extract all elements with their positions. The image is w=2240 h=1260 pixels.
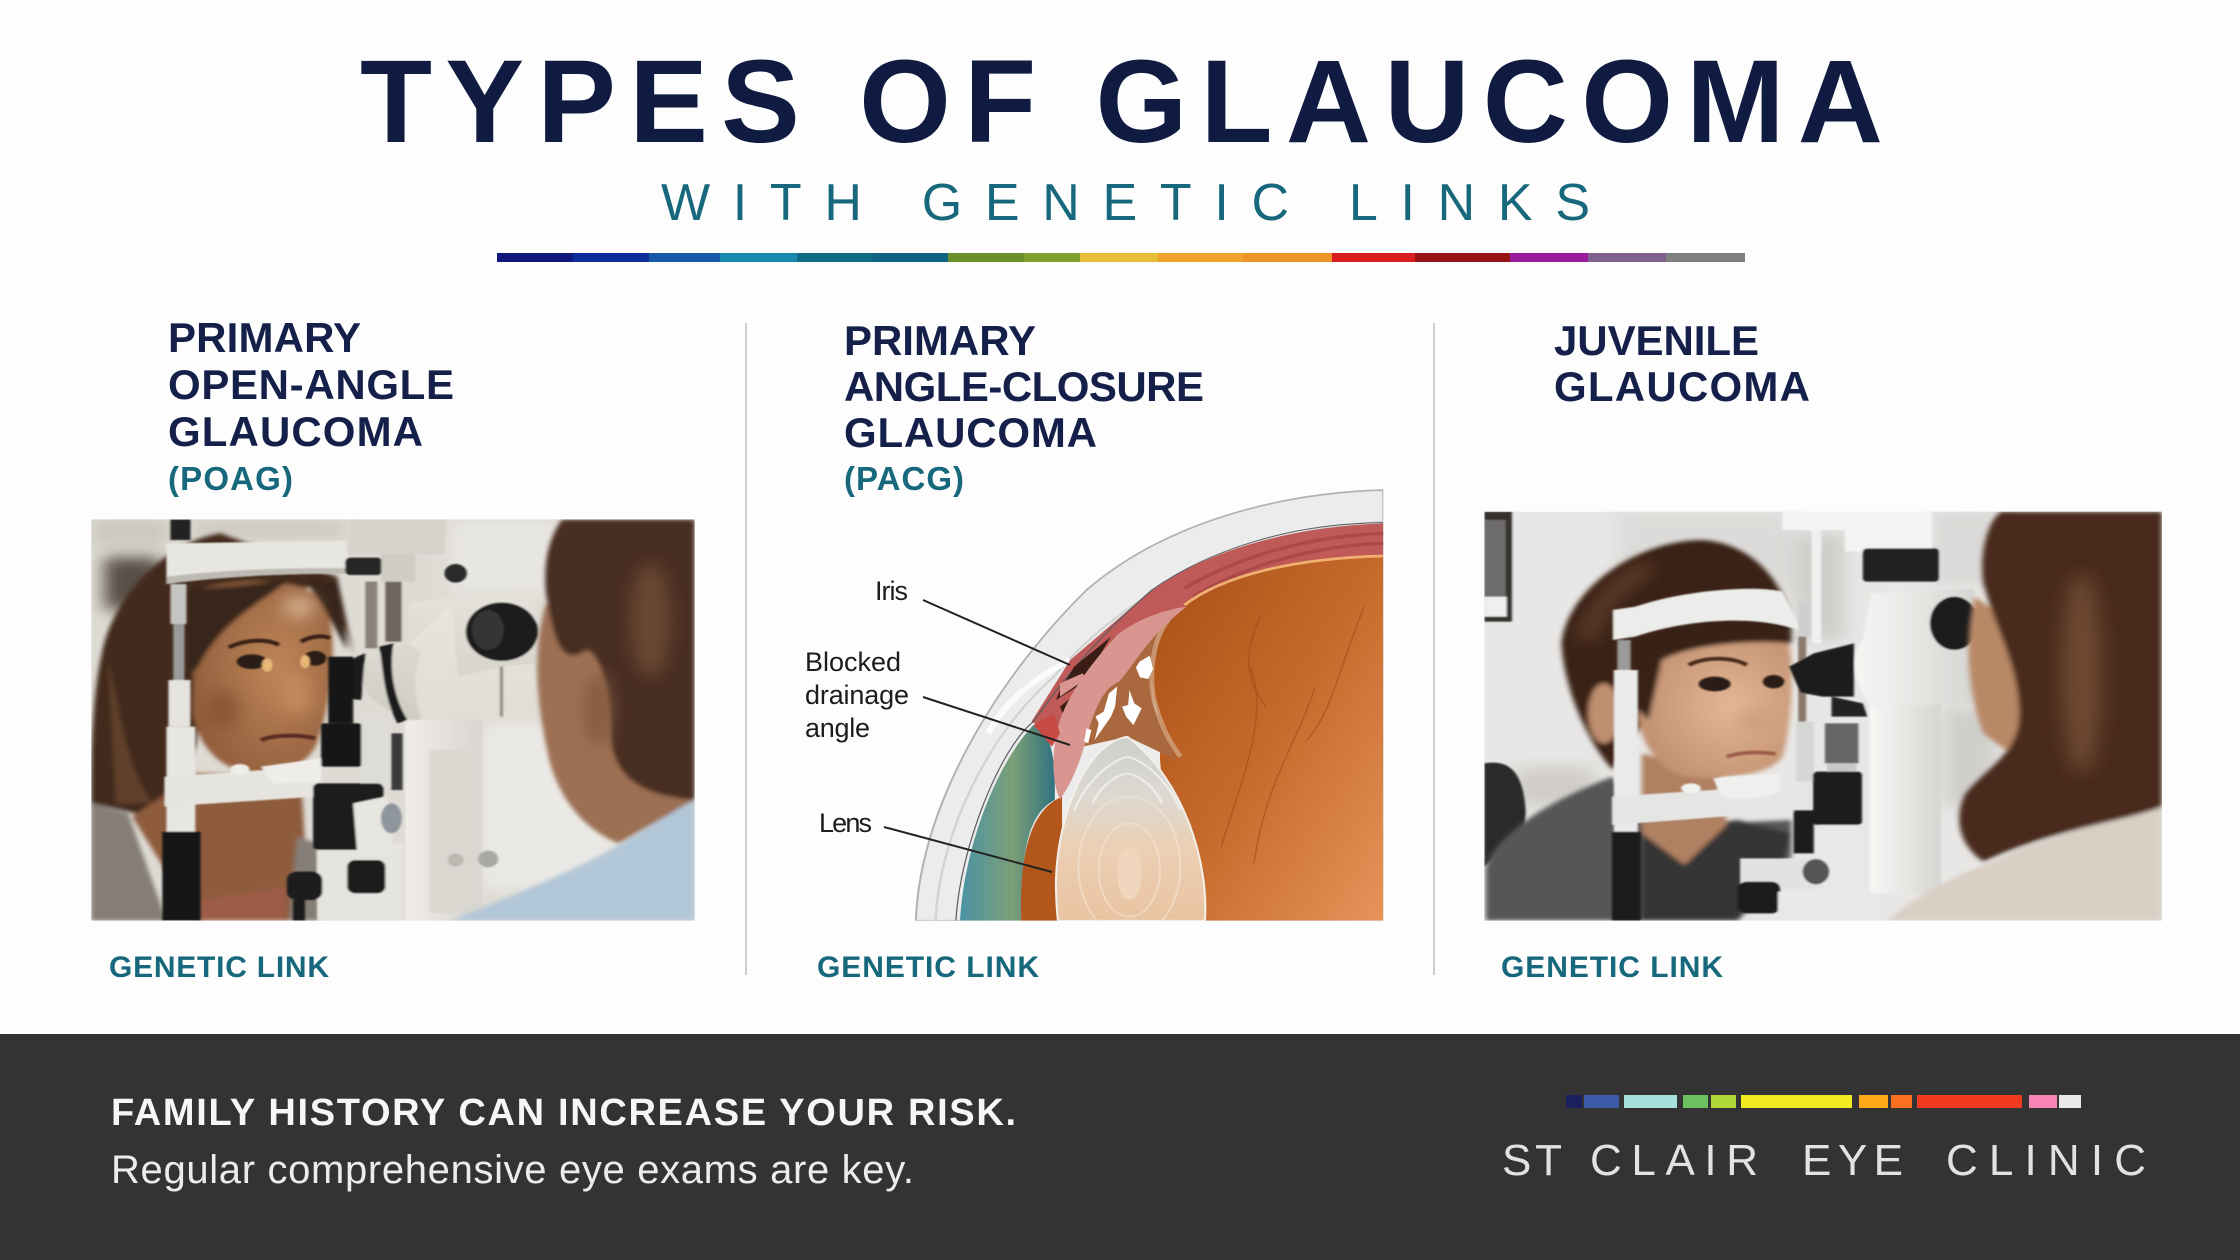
label: blocked drainage angle: angle: [805, 713, 870, 743]
logo wordmark: [1502, 1136, 2146, 1185]
label: genetic link: GENETIC LINK: [1501, 951, 1723, 984]
heading: POAG: GLAUCOMA: [168, 408, 423, 455]
panel: POAG: [91, 314, 695, 984]
heading: juvenile glaucoma: JUVENILE: [1554, 317, 1759, 364]
clinic logo: [1502, 1095, 2146, 1185]
heading: PACG: [844, 317, 1204, 497]
label: lens: [819, 808, 1052, 872]
heading: PACG: ANGLE-CLOSURE: [844, 363, 1204, 410]
heading: PACG: (PACG): [844, 460, 964, 497]
label: iris: Iris: [875, 576, 908, 606]
logo wordmark: CLINIC: [1946, 1136, 2146, 1185]
footer headline: FAMILY HISTORY CAN INCREASE YOUR RISK.: [111, 1092, 1016, 1134]
footer band: [0, 1034, 2240, 1260]
column dividers: [745, 323, 1435, 975]
logo wordmark: EYE: [1802, 1136, 1903, 1185]
label: genetic link: GENETIC LINK: [817, 951, 1039, 984]
label: blocked drainage angle: [805, 647, 1070, 745]
heading: POAG: [168, 314, 454, 497]
logo wordmark: CLAIR: [1590, 1136, 1758, 1185]
rainbow divider bar: [497, 253, 1745, 262]
panel: PACG: [805, 317, 1383, 984]
label: blocked drainage angle: drainage: [805, 680, 909, 710]
heading: POAG: OPEN-ANGLE: [168, 361, 454, 408]
heading: POAG: (POAG): [168, 460, 293, 497]
heading: PACG: PRIMARY: [844, 317, 1036, 364]
label: lens: Lens: [819, 808, 872, 838]
title: TYPES OF GLAUCOMA: [360, 36, 1883, 168]
photo: woman having slit-lamp eye exam: [91, 519, 695, 921]
logo wordmark: ST: [1502, 1136, 1562, 1185]
label: iris: [875, 576, 1070, 665]
logo colour bar: [1566, 1095, 2081, 1108]
label: blocked drainage angle: Blocked: [805, 647, 901, 677]
eye anatomy diagram: [914, 489, 1384, 921]
heading: juvenile glaucoma: GLAUCOMA: [1554, 363, 1810, 410]
heading: POAG: PRIMARY: [168, 314, 361, 361]
photo: boy having slit-lamp eye exam: [1484, 512, 2162, 921]
heading: juvenile glaucoma: [1554, 317, 1810, 410]
heading: PACG: GLAUCOMA: [844, 409, 1097, 456]
subtitle: WITH GENETIC LINKS: [661, 174, 1590, 232]
footer subtext: Regular comprehensive eye exams are key.: [111, 1148, 914, 1192]
label: genetic link: GENETIC LINK: [109, 951, 329, 984]
panel: juvenile glaucoma: [1484, 317, 2162, 984]
